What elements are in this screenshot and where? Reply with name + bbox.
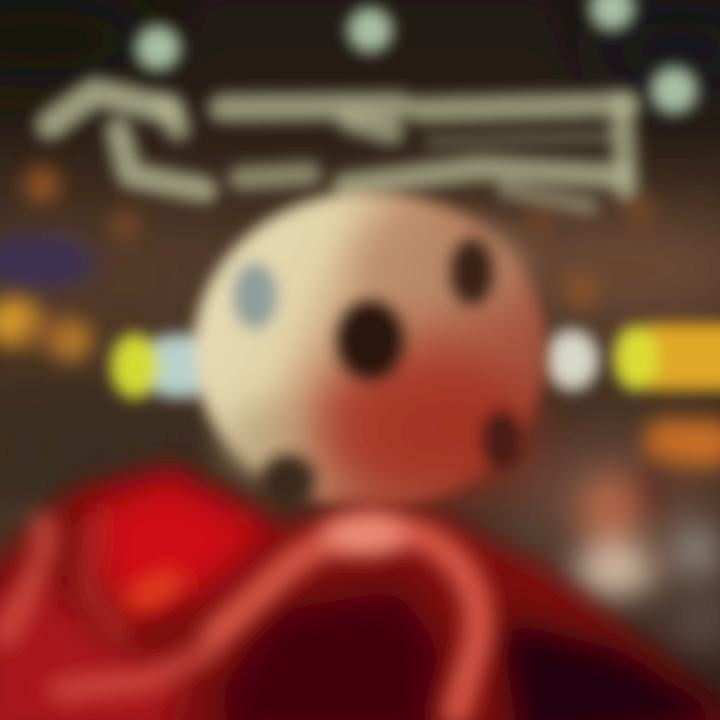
jersey highlight xyxy=(323,515,407,555)
jersey bright fold xyxy=(95,478,270,615)
ball hole: centre xyxy=(336,300,404,380)
ball hole: lower left xyxy=(260,454,316,506)
lights: left orange strip xyxy=(0,298,92,361)
lights: right orange strip xyxy=(645,420,720,466)
ball body xyxy=(194,192,546,508)
jersey glow xyxy=(119,560,191,620)
lights: right white and yellow strip xyxy=(546,324,720,390)
jersey lower left xyxy=(0,580,190,720)
ball hole: lower right xyxy=(482,410,522,470)
jersey salmon folds xyxy=(5,520,479,715)
player: red jersey xyxy=(0,465,720,720)
banner: blurred headline lettering xyxy=(50,92,628,206)
lights: left yellow and blue glow xyxy=(111,334,210,398)
lights: purple glow left xyxy=(0,236,95,288)
lights: pale bokeh dots xyxy=(136,0,697,113)
ball xyxy=(194,192,546,508)
ball red shading xyxy=(315,350,535,500)
ball lower left shading xyxy=(220,400,320,480)
jersey base xyxy=(0,465,720,720)
player: distant figure at right xyxy=(575,460,720,644)
background: crowd tones xyxy=(0,0,720,550)
jersey dark right xyxy=(500,620,720,720)
ball hole: upper right xyxy=(450,238,494,306)
ball top shading xyxy=(355,215,525,315)
ball hole: grey blue xyxy=(233,263,277,329)
lights: small orange bokeh xyxy=(25,168,652,305)
jersey dark centre xyxy=(220,590,440,720)
